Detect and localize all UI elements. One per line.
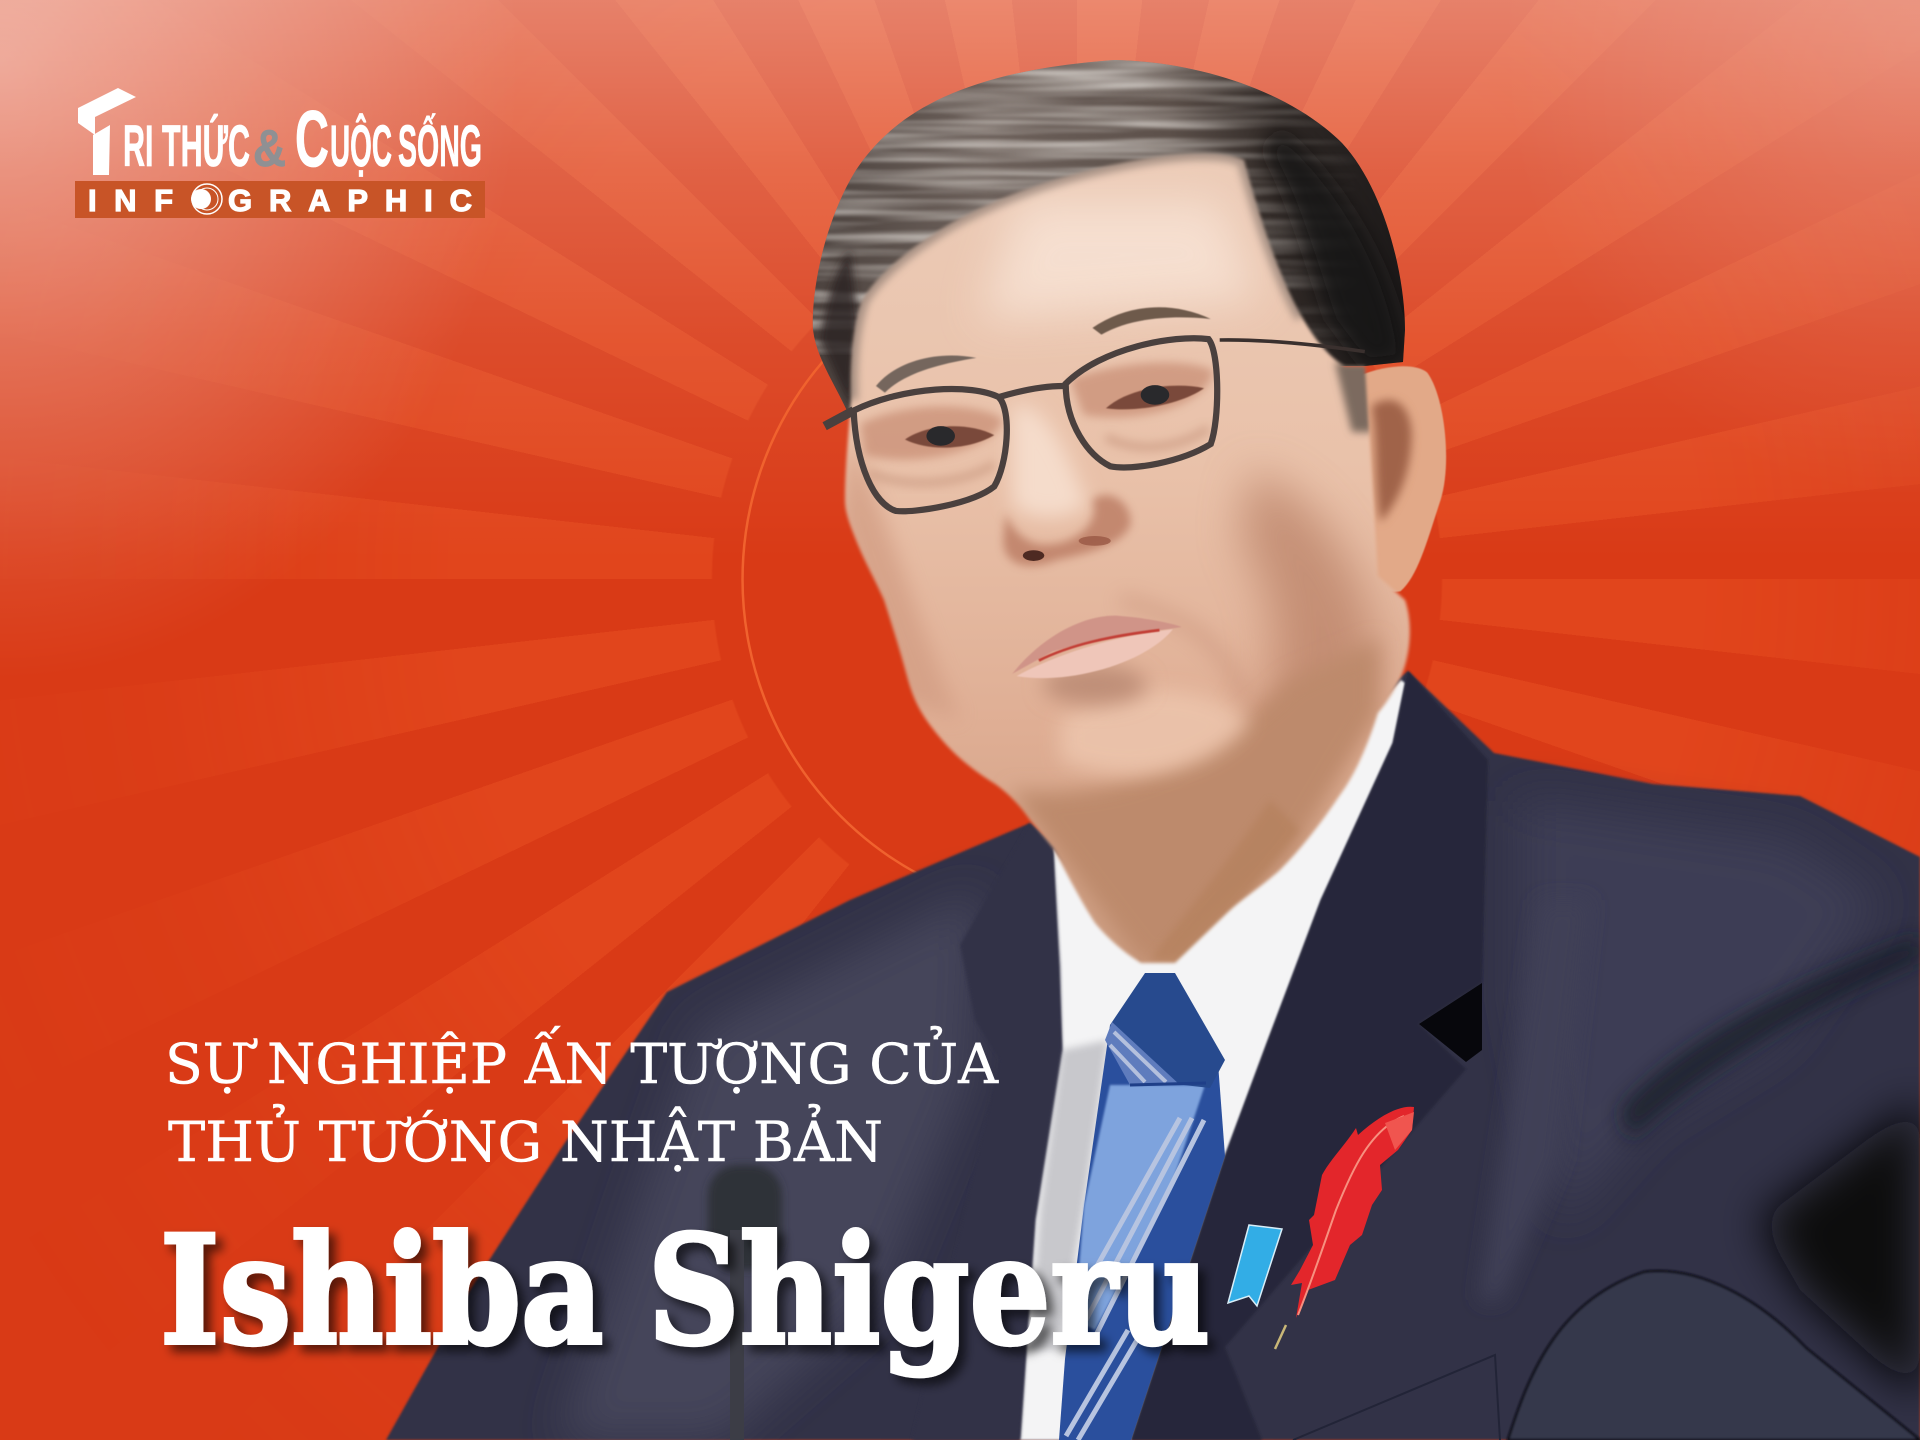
lapel notch <box>1419 983 1482 1062</box>
logo banner: INF <box>88 183 173 218</box>
eyes <box>860 363 1213 483</box>
logo wordmark: UỘC <box>330 114 392 179</box>
shirt shadow <box>1030 1040 1108 1350</box>
stripe on chest <box>1480 900 1590 1300</box>
logo wordmark: C <box>295 94 329 183</box>
title subtitle: SỰ NGHIỆP ẤN TƯỢNG CỦA <box>165 1026 999 1096</box>
title subtitle <box>165 1026 999 1174</box>
facial features in local coordinates <box>825 307 1365 678</box>
portrait of Ishiba Shigeru <box>386 55 1920 1440</box>
pocket line <box>1293 1355 1500 1440</box>
title subtitle: THỦ TƯỚNG NHẬT BẢN <box>168 1104 883 1174</box>
background with sun rays <box>0 0 1920 1132</box>
logo: Tri Thức & Cuộc Sống Infographic <box>75 88 485 218</box>
skin shading <box>840 153 1380 965</box>
logo wordmark: & <box>253 120 286 178</box>
logo banner: GRAPHIC <box>228 183 472 218</box>
left lapel <box>912 823 1062 1440</box>
dark fold shadows <box>1760 1100 1920 1400</box>
right lapel <box>1131 671 1488 1440</box>
logo banner <box>75 181 485 218</box>
mouth <box>1012 616 1182 678</box>
sideburn <box>1335 362 1374 432</box>
soft hairline <box>851 153 1302 400</box>
ear <box>1351 366 1446 592</box>
blue tie <box>1059 973 1225 1440</box>
title name: Ishiba Shigeru <box>160 1203 1210 1379</box>
nose <box>1003 405 1131 566</box>
right shoulder light <box>1520 800 1880 1220</box>
logo: Tri Thức & Cuộc Sống Infographic: SỐNG <box>398 114 482 179</box>
suit jacket <box>386 671 1920 1440</box>
glasses <box>825 338 1365 511</box>
logo wordmark: RI THỨC <box>123 114 250 179</box>
left sleeve light <box>560 890 980 1440</box>
microphone <box>708 1165 782 1440</box>
white shirt <box>1020 680 1405 1440</box>
sun circle arc <box>743 343 950 889</box>
logo wordmark <box>123 94 482 183</box>
eyebrows <box>876 307 1211 393</box>
logo T mark <box>78 88 136 175</box>
red feather pin <box>1275 1107 1414 1349</box>
blue ribbon pin <box>1228 1225 1282 1306</box>
hair <box>805 55 1410 440</box>
face and neck <box>830 140 1430 980</box>
lower arm <box>1508 1271 1920 1440</box>
